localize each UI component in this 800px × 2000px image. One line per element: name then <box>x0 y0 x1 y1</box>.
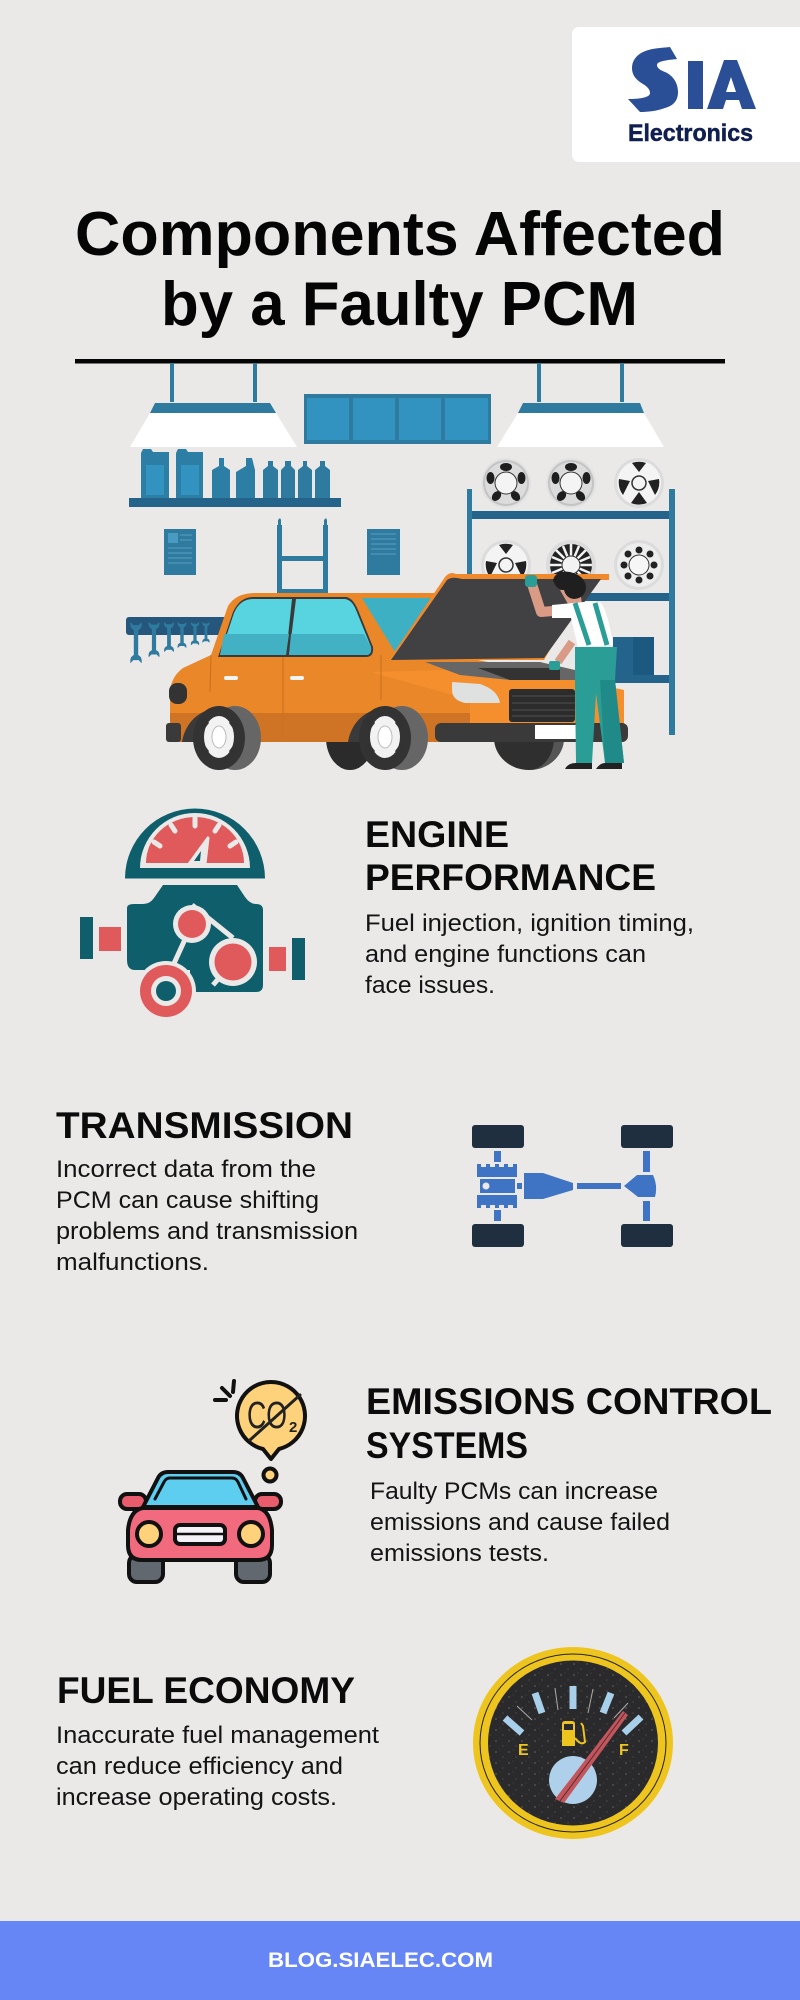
trousers <box>575 647 624 763</box>
wrench rack <box>126 617 230 663</box>
oil bottle shelf <box>129 449 341 507</box>
tail light <box>169 683 187 704</box>
lower arm <box>558 642 572 662</box>
icon: fuel gauge: F <box>619 1742 629 1759</box>
right ceiling lamp <box>497 363 664 447</box>
grille <box>509 689 575 722</box>
body text: malfunctions. <box>56 1249 209 1276</box>
body text: can reduce efficiency and <box>56 1753 343 1780</box>
icon: engine with gauge <box>80 808 305 1021</box>
body text: emissions tests. <box>370 1540 549 1567</box>
far side wheels <box>326 706 564 770</box>
suspenders <box>575 603 607 645</box>
body text <box>370 1478 670 1567</box>
icon: fuel gauge: E <box>518 1742 529 1759</box>
car windows <box>218 597 435 657</box>
section: fuel economy <box>56 1647 673 1839</box>
rear wheel <box>182 706 261 770</box>
speech bubble <box>237 1382 305 1459</box>
icon: fuel gauge <box>473 1647 673 1839</box>
license plate <box>535 725 577 739</box>
front wheel <box>348 706 428 770</box>
logo wordmark: Electronics <box>628 120 753 147</box>
footer bar: BLOG.SIAELEC.COM <box>268 1949 493 1972</box>
title: by a Faulty PCM <box>161 270 638 339</box>
engine bay <box>425 662 575 680</box>
body text: increase operating costs. <box>56 1784 337 1811</box>
logo mark: SIA <box>628 47 756 112</box>
neck and head <box>560 590 582 604</box>
body text: Faulty PCMs can increase <box>370 1478 658 1505</box>
mechanic <box>525 572 624 769</box>
wheel shelving unit <box>467 458 675 735</box>
pump glyph <box>562 1721 585 1746</box>
body text: problems and transmission <box>56 1218 358 1245</box>
body text: Fuel injection, ignition timing, <box>365 910 694 937</box>
wall rack ladder <box>277 518 328 595</box>
shirt <box>552 601 613 647</box>
body text: emissions and cause failed <box>370 1509 670 1536</box>
headlight <box>452 682 500 703</box>
section: transmission <box>56 1105 673 1276</box>
CO2 label: CO <box>247 1395 287 1437</box>
body text: Inaccurate fuel management <box>56 1722 379 1749</box>
open hood <box>389 573 609 660</box>
rear bumper <box>166 723 181 742</box>
car door lines <box>210 655 381 737</box>
garage window <box>304 394 491 444</box>
heading: PERFORMANCE <box>365 857 656 898</box>
body text <box>56 1722 379 1811</box>
body text <box>365 910 694 999</box>
logo card <box>572 27 800 162</box>
heading: SYSTEMS <box>366 1425 528 1466</box>
shoes <box>565 763 622 769</box>
section: emissions control systems <box>120 1381 772 1582</box>
heading: FUEL ECONOMY <box>57 1670 355 1711</box>
illustration: mechanic repairing car in garage <box>126 363 675 770</box>
heading: ENGINE <box>365 814 509 855</box>
title <box>75 200 725 339</box>
body text: face issues. <box>365 972 495 999</box>
door handles <box>226 676 302 680</box>
heading: TRANSMISSION <box>56 1105 353 1146</box>
toolbox on shelf <box>613 637 654 675</box>
title rule <box>75 359 725 364</box>
left ceiling lamp <box>130 363 297 447</box>
front bumper <box>435 723 628 742</box>
spare wheels <box>481 458 664 590</box>
icon: drivetrain <box>472 1125 673 1247</box>
body text: Incorrect data from the <box>56 1156 316 1183</box>
body text <box>56 1156 358 1276</box>
body text: PCM can cause shifting <box>56 1187 319 1214</box>
body text: and engine functions can <box>365 941 646 968</box>
icon: car with CO2 bubble: 2 <box>289 1419 297 1436</box>
title: Components Affected <box>75 200 725 269</box>
footer bar <box>0 1921 800 2000</box>
gloves <box>525 575 560 670</box>
car <box>166 573 628 770</box>
icon: car with CO2 bubble <box>120 1381 305 1582</box>
section: engine performance <box>80 808 694 1021</box>
hair <box>553 572 586 599</box>
wall posters <box>164 529 400 575</box>
heading: EMISSIONS CONTROL <box>366 1381 772 1422</box>
raised arm <box>532 584 553 612</box>
heading <box>365 814 656 898</box>
car body <box>170 593 624 742</box>
heading <box>366 1381 772 1466</box>
